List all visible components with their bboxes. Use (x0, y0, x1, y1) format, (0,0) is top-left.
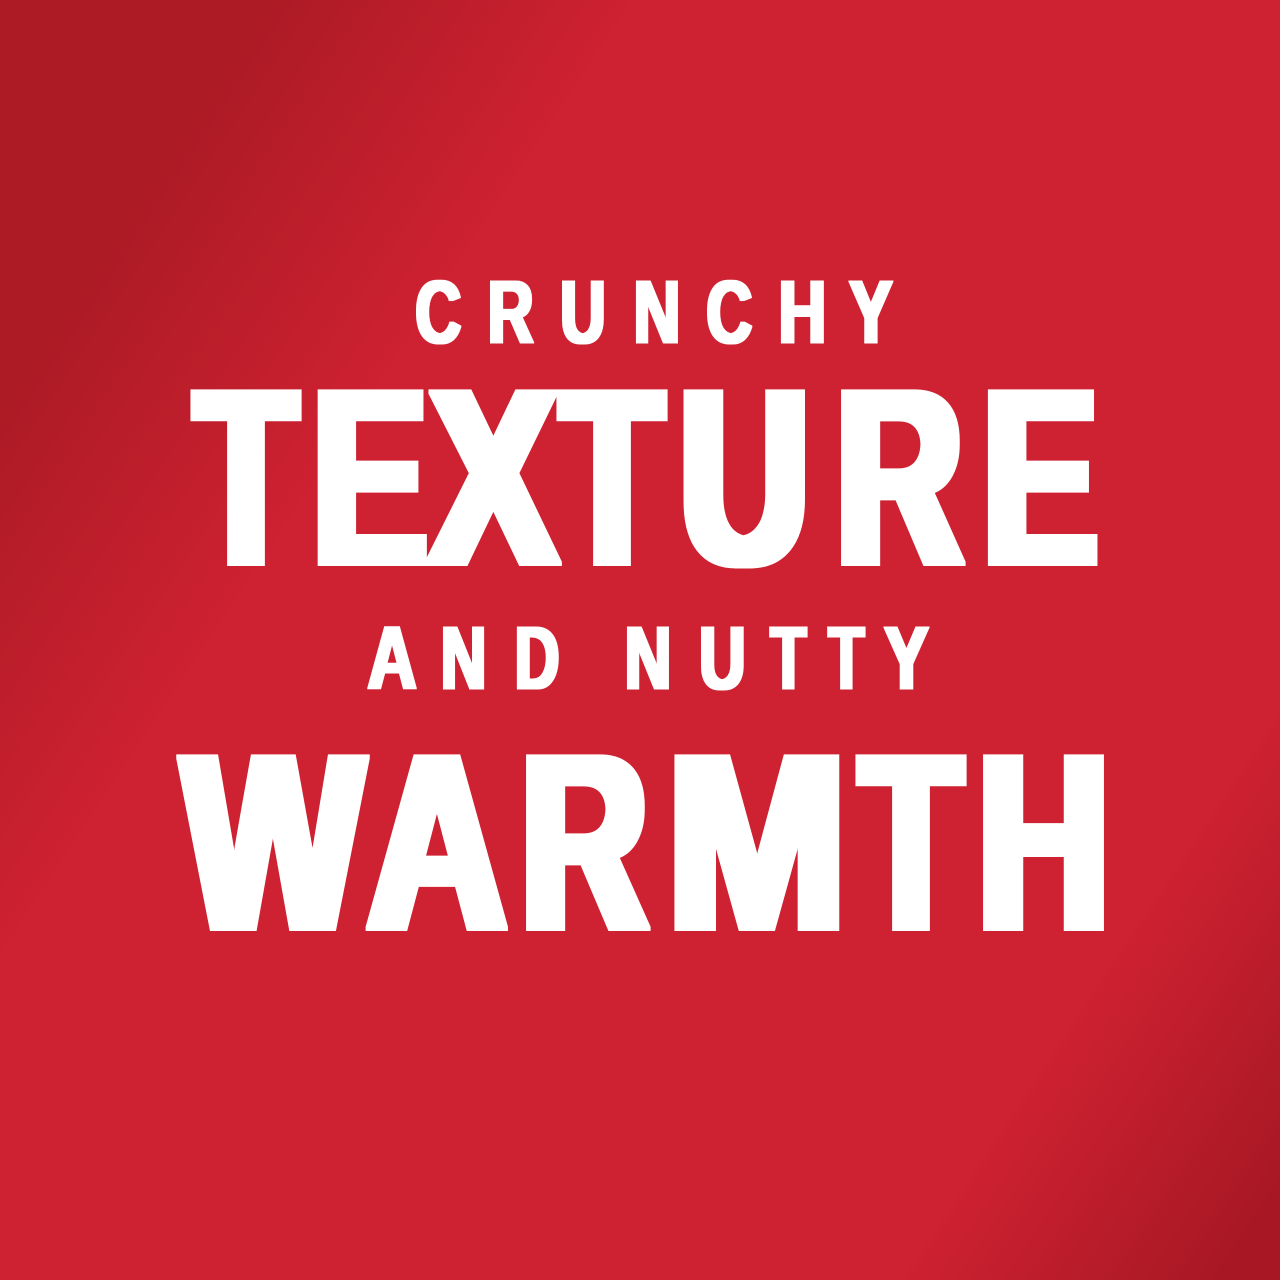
heading: TEXTURE: T (196, 338, 296, 618)
heading: WARMTH: T (861, 703, 961, 983)
text: AND NUTTY: N (441, 609, 486, 709)
text: CRUNCHY: H (778, 263, 826, 363)
text: CRUNCHY: R (488, 263, 534, 363)
heading: WARMTH: M (667, 703, 847, 983)
text: AND NUTTY: A (368, 609, 417, 709)
heading: WARMTH: H (978, 703, 1109, 983)
text: AND NUTTY (368, 609, 929, 709)
heading: WARMTH: W (183, 703, 363, 983)
heading: TEXTURE: X (430, 338, 557, 618)
text: AND NUTTY: U (699, 609, 746, 709)
heading: TEXTURE: U (680, 338, 809, 618)
text: CRUNCHY: U (560, 263, 606, 363)
heading: WARMTH: A (368, 703, 506, 983)
text: AND NUTTY: T (828, 609, 864, 709)
text: AND NUTTY: T (770, 609, 806, 709)
text: AND NUTTY: Y (884, 609, 929, 709)
text: CRUNCHY: C (706, 263, 752, 363)
text: CRUNCHY (415, 263, 893, 363)
heading: TEXTURE (196, 338, 1097, 618)
heading: WARMTH: R (521, 703, 647, 983)
text: AND NUTTY: N (625, 609, 671, 709)
heading: TEXTURE: E (313, 338, 426, 618)
heading: TEXTURE: R (836, 338, 962, 618)
heading: TEXTURE: T (562, 338, 662, 618)
heading: WARMTH (183, 703, 1109, 983)
text: CRUNCHY: Y (849, 263, 893, 363)
heading: TEXTURE: E (984, 338, 1097, 618)
text: CRUNCHY: C (415, 263, 461, 363)
text: CRUNCHY: N (634, 263, 680, 363)
text: AND NUTTY: D (515, 609, 559, 709)
